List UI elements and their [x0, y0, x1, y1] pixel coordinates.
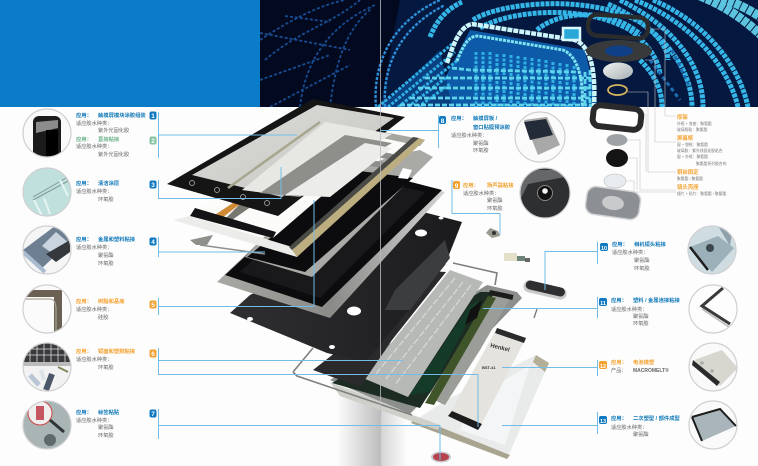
top glass with black frame: [167, 99, 405, 216]
right callout 11: plastic metal bonding: 聚氨酯: [633, 312, 649, 320]
right callout 8: touch panel window: 8: [441, 118, 445, 125]
left callout 7: label bonding: 标签粘贴: [98, 408, 120, 416]
left photo: grid and tubes: [23, 343, 71, 391]
top gasket ring: [587, 14, 649, 39]
right leader lines: [381, 115, 598, 434]
camera part labels: 屏幕框: [677, 134, 694, 142]
small screw: [534, 309, 537, 318]
right callout 9: speaker sealing: [453, 181, 514, 212]
left photo: brown frame corner: [26, 290, 62, 332]
left callout 3: clean coating: [76, 179, 156, 203]
right callout 9: speaker sealing: 环氧胶: [487, 204, 503, 212]
metal housing: [584, 185, 642, 221]
left callout 1: touch panel: [76, 111, 156, 134]
left callout 1: touch panel: 触摸屏模块涂胶组装: [98, 111, 146, 119]
left photo ring 6: [23, 401, 71, 449]
left callout 2: direct bonding: 适应胶水种类：: [76, 142, 112, 150]
right callout 10: camera lens bonding: 适应胶水种类：: [612, 248, 648, 256]
right callout 12: battery molding: 12: [600, 364, 606, 370]
camera part labels: 玻璃框粘：聚氨酯: [677, 127, 708, 132]
metal frame sheet: [190, 150, 433, 277]
right callout 13: overmolding: [599, 414, 680, 438]
right callout 9: speaker sealing: 适应胶水种类：: [463, 189, 499, 197]
right photo ring 5: [689, 343, 737, 391]
battery: Henkel: [490, 343, 510, 354]
left callout 2: direct bonding: 直接粘接: [98, 135, 120, 143]
right callout 10: camera lens bonding: [600, 240, 666, 272]
right callout 10: camera lens bonding: 环氧胶: [634, 264, 650, 272]
silver dome: [603, 62, 633, 80]
left photo ring 1: [23, 109, 71, 157]
oval plate: [586, 40, 652, 62]
right photo: phone front: [524, 117, 560, 155]
right callout 11: plastic metal bonding: [599, 296, 680, 327]
left callout 2: direct bonding: 2: [151, 138, 155, 145]
vibration motor: [504, 253, 530, 262]
right callout 9: speaker sealing: 聚氨酯: [487, 196, 503, 204]
left callout 6: mesh and plastic bonding: 环氧胶: [98, 363, 114, 371]
left photo ring 5: [23, 343, 71, 391]
left callout 5: resin and substrate: 树脂和基底: [98, 297, 125, 305]
left callout 4: metal plastic bonding: 应用：: [76, 235, 92, 243]
left callout 4: metal plastic bonding: 聚氨酯: [98, 251, 114, 259]
right callout 8: touch panel window: 应用：: [451, 114, 467, 122]
right callout 11: plastic metal bonding: 适应胶水种类：: [611, 305, 647, 313]
right callout 8: touch panel window: 触摸屏板 /: [473, 114, 498, 122]
header photo: circuit lock pattern: [260, 0, 758, 107]
right callout 11: plastic metal bonding: 11: [600, 301, 606, 307]
camera bar part: [522, 279, 568, 301]
camera part labels: 摩架: [677, 113, 688, 121]
right callout 12: battery molding: 应用：: [611, 358, 627, 366]
camera part labels: 聚氨酯 / 聚氨酯: [677, 176, 703, 181]
left callout 5: resin and substrate: 5: [151, 302, 155, 309]
right callout 10: camera lens bonding: 聚氨酯: [634, 256, 650, 264]
right callout 8: touch panel window: 适应胶水种类：: [451, 131, 487, 139]
left callout 6: mesh and plastic bonding: [76, 347, 156, 371]
right callout 11: plastic metal bonding: 环氧胶: [633, 319, 649, 327]
right callout 13: overmolding: 13: [600, 419, 606, 425]
right callout 9: speaker sealing: 应用：: [463, 181, 479, 189]
right photo ring 4: [689, 285, 737, 333]
left photo: metal frame corner: [23, 226, 72, 274]
right callout 8: touch panel window: 聚氨酯: [473, 139, 489, 147]
left callout 5: resin and substrate: 硅胶: [98, 313, 108, 321]
black disc: [606, 149, 628, 167]
left callout 3: clean coating: 3: [151, 182, 155, 189]
left callout 3: clean coating: 清洁涂层: [98, 179, 119, 187]
camera part labels: [677, 113, 727, 196]
right callout 12: battery molding: MACROMELT®: [633, 367, 669, 374]
right photo: overmolded part: [691, 408, 736, 442]
right photo ring 1: [515, 112, 565, 162]
left callout 6: mesh and plastic bonding: 镜面和塑胶粘接: [98, 347, 136, 355]
left callout 6: mesh and plastic bonding: 6: [151, 351, 155, 358]
right callout 12: battery molding: 电池模塑: [633, 358, 655, 366]
left callout 1: touch panel: 紫外光固化胶: [98, 126, 129, 134]
back case and circuit board: [330, 285, 522, 430]
exploded camera seal parts: [584, 14, 652, 221]
battery: [448, 328, 526, 430]
left photo ring 2: [23, 168, 71, 216]
right photo: camera lens bracket: [688, 226, 736, 274]
left callout 6: mesh and plastic bonding: 应用：: [76, 347, 92, 355]
thin black plate: [313, 270, 446, 387]
left callout 4: metal plastic bonding: 环氧胶: [98, 259, 114, 267]
left callout 4: metal plastic bonding: 适应胶水种类：: [76, 243, 112, 251]
left callout 1: touch panel: 1: [151, 113, 155, 120]
left callout 6: mesh and plastic bonding: 适应胶水种类：: [76, 355, 112, 363]
gold ring: [608, 85, 627, 95]
black foam plate with holes: [230, 212, 462, 362]
left callout 7: label bonding: 应用：: [76, 408, 92, 416]
right callout 8: touch panel window: 环氧胶: [473, 146, 489, 154]
display module: [217, 165, 445, 318]
camera part labels: 窗 + 外框：聚氨酯: [677, 154, 708, 159]
silver dish: [604, 174, 626, 188]
right callout 13: overmolding: 适应胶水种类：: [611, 423, 647, 431]
right callout 11: plastic metal bonding: 塑料 / 金属连接粘接: [633, 296, 680, 304]
keypad sheet: [363, 270, 483, 397]
right callout 13: overmolding: 二次塑型 / 部件成型: [633, 414, 680, 422]
right photo: speaker: [520, 168, 570, 218]
left callout 7: label bonding: [76, 408, 156, 439]
black gasket: [592, 105, 642, 130]
camera part labels: 玻璃胶：紫外线固化胶粘合: [677, 148, 723, 153]
left callout 3: clean coating: 环氧胶: [98, 195, 114, 203]
right photo: battery: [692, 350, 736, 386]
left callout 7: label bonding: 适应胶水种类：: [76, 416, 112, 424]
right photo: metal plastic corner: [700, 287, 731, 327]
right photo ring 3: [688, 226, 736, 274]
right callout 8: touch panel window: 窗口贴膜预涂胶: [473, 123, 511, 131]
left photo: label dispenser: [23, 401, 71, 449]
right photo ring 6: [689, 401, 737, 449]
left callout 5: resin and substrate: 应用：: [76, 297, 92, 305]
right callout 10: camera lens bonding: 10: [601, 246, 607, 252]
camera part labels: 镜头壳座: [677, 183, 699, 191]
left photo: smartphone: [33, 116, 61, 156]
right callout 12: battery molding: 产品：: [611, 366, 627, 374]
back cover: [411, 355, 549, 459]
camera part labels: 铜丝固定: [677, 168, 699, 176]
left leader lines: [158, 112, 478, 460]
left photo: glass sheets: [23, 168, 71, 216]
right callout 10: camera lens bonding: 相机镜头粘接: [634, 240, 666, 248]
left photo ring 3: [23, 226, 71, 274]
spine shadow at the fold: [337, 340, 407, 466]
wire frame: [293, 263, 497, 415]
left callout 7: label bonding: 7: [151, 411, 155, 418]
battery: BST-41: [482, 365, 496, 370]
left photo ring 4: [23, 285, 71, 333]
fold line: [380, 0, 382, 416]
camera part labels: 聚氨酯系列胶合剂: [696, 161, 727, 166]
right callout 13: overmolding: 应用：: [611, 414, 627, 422]
right photo ring 2: [520, 168, 570, 218]
blue header panel: [0, 0, 260, 107]
left callout 2: direct bonding: [76, 135, 156, 158]
left callout 4: metal plastic bonding: 金属和塑料粘接: [98, 235, 136, 243]
camera part labels: 外框 + 底座：聚氨酯: [677, 121, 712, 126]
left callout 4: metal plastic bonding: 4: [151, 239, 155, 246]
right callout 9: speaker sealing: 扬声器粘接: [487, 181, 514, 189]
left callout 4: metal plastic bonding: [76, 235, 156, 267]
right callout 9: speaker sealing: 9: [455, 183, 459, 190]
exploded phone assembly: [167, 99, 568, 462]
left callout 7: label bonding: 聚氨酯: [98, 423, 114, 431]
gold-edged frame: [173, 120, 425, 257]
left callout 7: label bonding: 环氧胶: [98, 431, 114, 439]
right callout 11: plastic metal bonding: 应用：: [611, 296, 627, 304]
left callout 3: clean coating: 适应胶水种类：: [76, 187, 112, 195]
left callout 1: touch panel: 应用：: [76, 111, 92, 119]
right callout 12: battery molding: [599, 358, 669, 374]
right callout 13: overmolding: 聚氨酯: [633, 430, 649, 438]
silver disc: [606, 134, 628, 146]
right callout 8: touch panel window: [439, 114, 511, 154]
left callout 5: resin and substrate: 适应胶水种类：: [76, 305, 112, 313]
camera part labels: 镜片 + 粘片：聚氨酯 / 聚氨酯: [677, 191, 726, 196]
left callout 3: clean coating: 应用：: [76, 179, 92, 187]
small speaker part: [486, 228, 500, 238]
camera part labels: 窗 + 塑框：聚氨酯: [677, 142, 708, 147]
right callout 10: camera lens bonding: 应用：: [612, 240, 628, 248]
left callout 5: resin and substrate: [76, 297, 156, 321]
left callout 1: touch panel: 适应胶水种类：: [76, 119, 112, 127]
red seal disc: [431, 452, 451, 462]
camera part leader lines: [626, 29, 676, 192]
left callout 2: direct bonding: 应用：: [76, 135, 92, 143]
left callout 2: direct bonding: 紫外光固化胶: [98, 150, 129, 158]
